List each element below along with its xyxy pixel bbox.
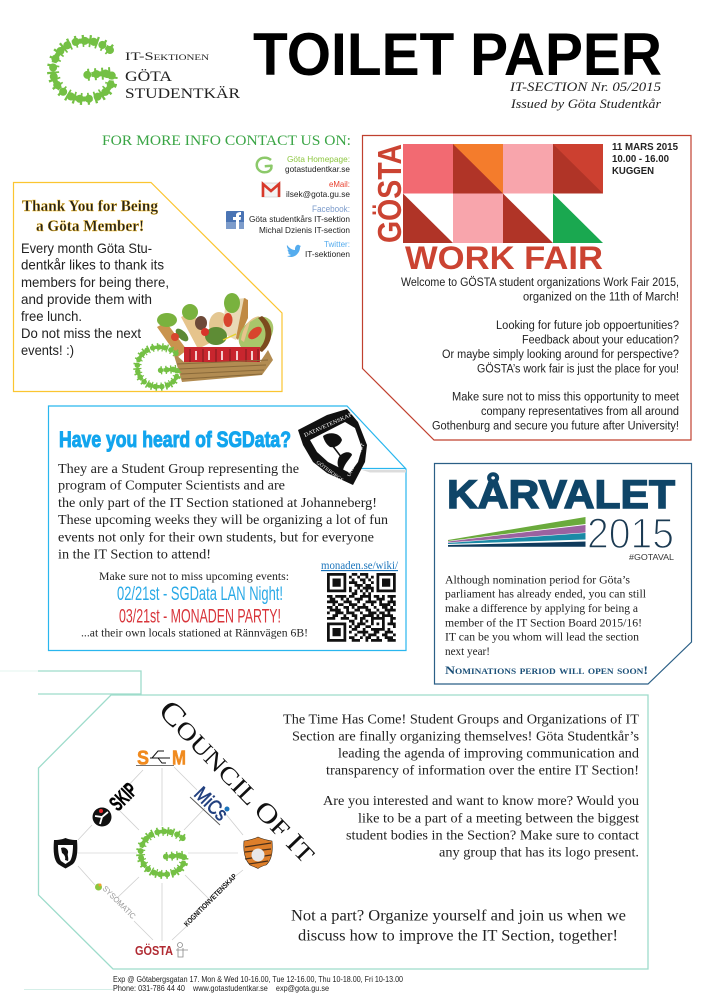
logo: SKIP [92,779,142,826]
logo: orange tiger shield [244,837,272,868]
work fair graphic [403,144,603,243]
body text: Feedback about your education? [522,334,679,346]
connecting lines [77,767,243,941]
heading [22,198,158,235]
logo: Sysomatic: SYSOMATIC [101,884,137,921]
icon: Datavetenskap shield: DATAVETENSKAP [303,412,353,439]
date and place: 10.00 - 16.00 [612,154,669,165]
heading: a Göta Member! [36,218,144,235]
footer: Exp @ Götabergsgatan 17. Mon & Wed 10-16.00, Tue 12-16.00, Thu 10-18.00, Fri 10-13.00 [113,974,403,984]
body text: any group that has its logo present. [439,846,639,860]
date and place [612,142,678,177]
body text: in the IT Section to attend! [58,548,211,562]
panel: Council of IT [0,671,648,990]
date and place: KUGGEN [612,166,654,177]
panel outline with folded corner [48,406,406,650]
logo: S&M: S [137,748,149,770]
closing call to action: Not a part? Organize yourself and join us when we [291,908,626,924]
logo: SKIP: SKIP [105,779,142,816]
subtitle: issue info: Issued by Göta Studentkår [510,96,662,111]
panel: Have you heard of SGData [48,406,406,650]
Council of IT rotated heading: COUNCIL OF IT [152,693,325,870]
body text: Looking for future job oppoertunities? [496,320,679,332]
body text: like to be a part of a meeting between the biggest [358,812,639,826]
panel: Göta Work Fair [362,136,691,440]
closing call to action: discuss how to improve the IT Section, together! [298,928,618,944]
logo: S&M [136,748,186,770]
body text: next year! [445,644,490,658]
body text: make a difference by applying for being a [445,601,639,615]
events list: 03/21st - MONADEN PARTY! [119,606,281,628]
body text [21,240,169,358]
icon: twitter bird [287,245,301,257]
body text: events! :) [21,342,74,358]
nominations note: Nominations period will open soon! [445,663,648,677]
contact: facebook: Göta studentkårs IT-sektion [249,214,350,224]
contact block [102,133,351,259]
body text: organized on the 11th of March! [523,292,679,304]
body text: and provide them with [21,291,152,307]
body text: student bodies in the Section? Make sure to contact [346,828,639,844]
icon: Datavetenskap shield: GÖTEBORGS [315,460,344,484]
logo text: IT-Sektionen [125,49,209,63]
body text: events not only for their own students, but for everyone [58,530,374,546]
panel: thank you for being a Göta member [14,182,282,392]
body text: Gothenburg and secure you future after University! [432,420,679,432]
icon: G wreath [137,347,177,387]
body text [401,277,680,432]
icon: Datavetenskap shield [298,409,367,485]
icon: lunch basket [157,293,280,382]
logo: Kognitionsvetenskap: KOGNITIONVETENSKAP [182,872,239,928]
contact heading: FOR MORE INFO CONTACT US ON: [102,133,351,149]
hashtag: #GOTAVAL [629,553,675,562]
contact: homepage [285,154,350,174]
body text [58,462,388,562]
body text: Do not miss the next [21,325,141,341]
body text: These upcoming weeks they will be organizing a lot of fun [58,513,388,528]
panel outline [0,671,648,990]
body text: member of the IT Section Board 2015/16! [445,616,642,630]
events list: Make sure not to miss upcoming events: [99,571,289,583]
body text: They are a Student Group representing the [58,462,299,477]
logo text: STUDENTKÄR [125,85,240,102]
contact: homepage: Göta Homepage: [287,154,350,164]
body text: program of Computer Scientists and are [58,478,285,494]
contact: email: eMail: [329,179,350,189]
contact: facebook: Michal Dzienis IT-section [259,225,350,235]
contact: twitter: IT-sektionen [305,249,350,259]
year 2015: 2015 [587,510,674,558]
icon: centre G wreath [141,831,184,874]
logo text: GÖTA [125,68,172,85]
panel outline [362,136,691,440]
WORK FAIR label: WORK FAIR [405,240,603,276]
body text: members for being there, [21,274,169,290]
body text [445,572,647,658]
body text: IT can be you whom will lead the section [445,630,639,644]
body text: Are you interested and want to know more? Would you [323,794,639,809]
logo text [125,49,240,102]
icon: green leaf G wreath [53,41,112,99]
events list: 02/21st - SGData LAN Night! [117,584,283,605]
events list: ...at their own locals stationed at Rännvägen 6B! [81,628,308,640]
contact: facebook [249,204,350,235]
QR code [327,574,396,640]
closing call to action [291,908,626,944]
body text: Welcome to GÖSTA student organizations Work Fair 2015, [401,277,679,289]
body text: Or maybe simply looking around for perspective? [442,349,679,361]
body text: parliament has already ended, you can still [445,586,647,600]
panel outline [434,464,692,684]
body text: company representatives from all around [481,406,679,418]
date and place: 11 MARS 2015 [612,142,678,153]
subtitle: issue info [509,79,662,111]
link: monaden.se/wiki/ [321,560,399,572]
heading: Thank You for Being [22,198,158,215]
icon: Datavetenskap shield: UNIVERSITET [347,443,366,478]
title: TOILET PAPER [253,21,662,88]
body text: Every month Göta Stu- [21,240,152,256]
panel outline [14,182,282,392]
GÖSTA vertical label: GÖSTA [371,144,408,243]
body text: Although nomination period for Göta’s [445,572,630,586]
footer: Phone: 031-786 44 40 www.gotastudentkar.se exp@gota.gu.se [113,983,329,993]
body text: the only part of the IT Section stationed at Johanneberg! [58,496,377,511]
icon: gmail [262,183,280,197]
body text: GÖSTA’s work fair is just the place for you! [477,364,679,376]
coloured wedges [448,517,586,547]
contact: homepage: gotastudentkar.se [285,164,350,174]
contact: email [286,179,350,199]
body text: dentkår likes to thank its [21,256,164,272]
icon: small G [257,158,272,172]
logo: MiCs: MiCs [189,783,232,825]
Kårvalet wordmark: KÅRVALET [447,472,675,517]
body text: Make sure not to miss this opportunity to meet [452,392,680,404]
contact: facebook: Facebook: [312,204,350,214]
footer [113,974,403,993]
contact: email: ilsek@gota.gu.se [286,189,350,199]
body text: transparency of information over the entire IT Section! [326,764,639,778]
logo: black shield [54,838,77,868]
events list [81,571,308,640]
contact: twitter: Twitter: [324,239,350,249]
heading: Have you heard of SGData? [59,427,291,452]
logo: GÖSTA: GÖSTA [135,943,174,958]
logo: S&M: M [172,748,186,770]
contact: twitter [305,239,350,259]
body text: leading the agenda of improving communication and [338,746,639,762]
header logo: Göta Studentkår [53,41,240,102]
subtitle: issue info: IT-SECTION Nr. 05/2015 [509,79,662,94]
panel: Kårvalet 2015 [434,464,692,684]
body text: free lunch. [21,308,82,324]
body text: Section are finally organizing themselves! Göta Studentkår’s [292,730,639,744]
network diagram [54,748,272,958]
icon: facebook [226,211,244,229]
body text: The Time Has Come! Student Groups and Organizations of IT [283,712,639,728]
body text [283,712,639,860]
